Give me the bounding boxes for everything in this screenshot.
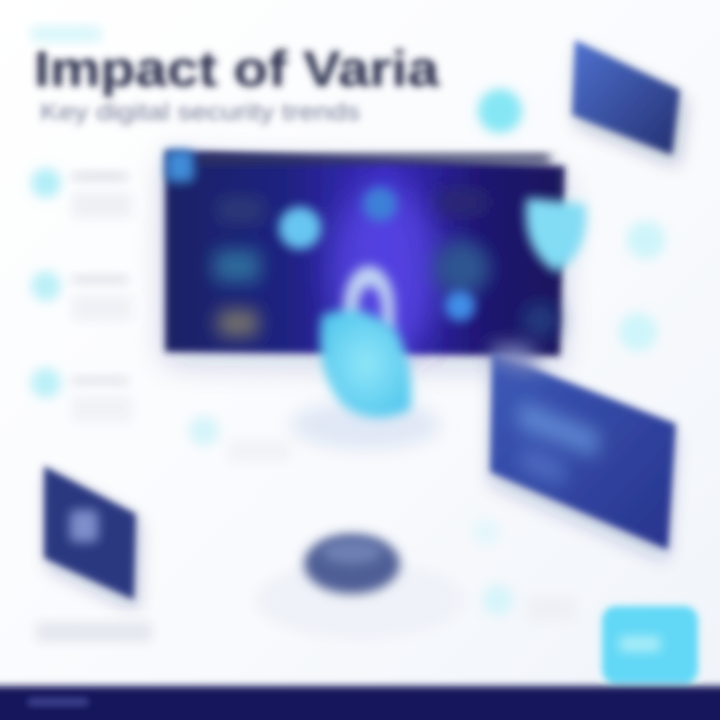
list item 1 <box>31 168 132 218</box>
card bright content <box>518 400 600 458</box>
panel corner icon <box>166 150 194 182</box>
card icon <box>70 510 98 542</box>
list item 2 <box>31 271 132 321</box>
panel widget: lower left <box>218 310 258 336</box>
header block <box>30 26 440 126</box>
panel widget: upper left <box>218 198 264 222</box>
panel widget: upper right <box>438 190 488 214</box>
panel widget: right circle <box>434 240 490 296</box>
footer bar <box>0 686 720 720</box>
icon: shield <box>526 198 586 272</box>
button: cyan call to action <box>602 606 698 684</box>
bottom-left caption <box>36 622 152 642</box>
title: Impact of Varia <box>34 41 440 97</box>
icon: small bubble centre-left <box>189 416 219 446</box>
text: centre annotation <box>228 440 290 462</box>
card lower content <box>520 444 566 488</box>
list item 3 <box>31 368 132 422</box>
card highlight top <box>490 345 540 375</box>
icon: padlock <box>290 266 440 449</box>
text: lower right note <box>528 596 576 622</box>
icon: cyan circle top <box>478 89 522 133</box>
panel node: top <box>363 187 397 221</box>
main dashboard panel <box>165 150 565 366</box>
icon: right bubble lower <box>619 313 657 351</box>
bottom-left tilted card <box>44 466 140 612</box>
subtitle: Key digital security trends <box>40 99 360 126</box>
icon: small bubble lower right 2 <box>483 585 513 615</box>
top-right tilted card <box>572 40 686 166</box>
icon: right bubble upper <box>627 221 665 259</box>
panel widget: middle left <box>214 250 260 282</box>
panel glow <box>330 185 440 355</box>
left list <box>31 168 132 422</box>
panel node: lower right <box>445 291 475 321</box>
panel top strip <box>200 154 550 164</box>
eyebrow pill <box>30 26 102 42</box>
panel widget: far right <box>522 302 558 338</box>
centre platform with disc <box>255 534 465 640</box>
bottom-right tilted card <box>490 345 676 562</box>
panel node: bright <box>279 207 321 249</box>
icon: small bubble lower right 1 <box>473 519 499 545</box>
